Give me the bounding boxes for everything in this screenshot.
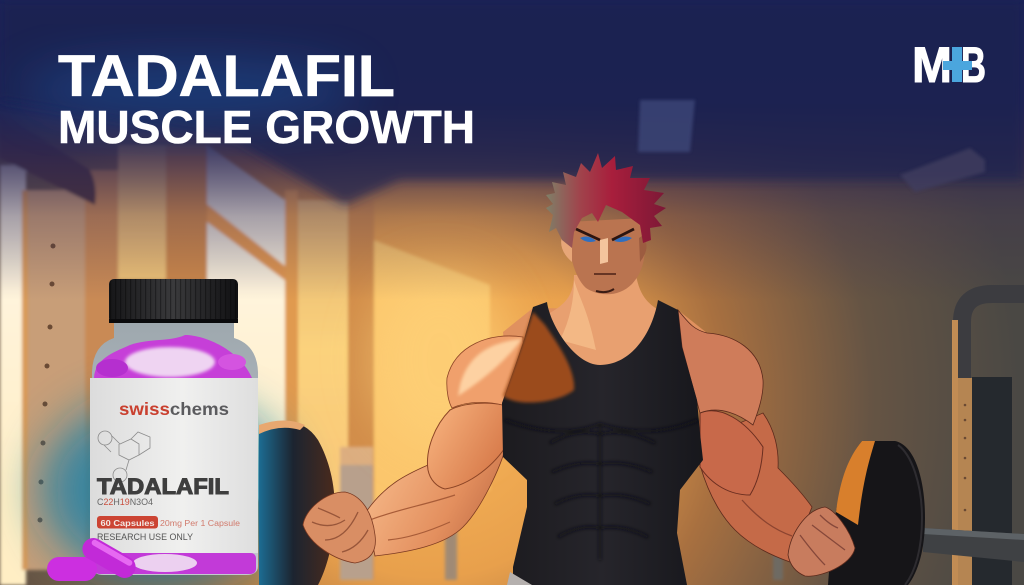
formula: C22H19N3O4	[97, 497, 153, 508]
logo: M+B: B	[961, 37, 986, 93]
red spiky hair	[546, 153, 666, 248]
right arm	[678, 310, 855, 576]
grey shorts	[507, 572, 532, 585]
glass jar	[92, 323, 258, 575]
face	[561, 218, 647, 294]
dosage: 20mg Per 1 Capsule	[160, 518, 240, 528]
right gym machine	[952, 294, 1024, 585]
swisschems brand: swisschems	[119, 399, 229, 419]
molecule diagram	[98, 431, 150, 482]
logo: M+B: M	[912, 37, 952, 93]
left arm	[303, 336, 523, 563]
bottle cap	[109, 279, 238, 323]
research use only: RESEARCH USE ONLY	[97, 532, 194, 543]
black tank top	[502, 300, 703, 585]
title	[58, 44, 475, 153]
right barbell	[828, 441, 1024, 585]
left fist	[303, 492, 375, 563]
loose capsules	[47, 534, 140, 582]
tank sun patch	[503, 312, 574, 403]
abdominal muscles	[505, 420, 698, 560]
purple capsules bottom	[94, 553, 256, 574]
logo: M+B	[912, 37, 986, 93]
forearm	[366, 410, 507, 556]
left barbell plate	[259, 420, 335, 585]
capsule badge	[97, 516, 158, 528]
capsule badge: 60 Capsules	[100, 518, 155, 528]
label: TADALAFIL: TADALAFIL	[97, 474, 229, 499]
shoulders and traps	[503, 308, 707, 400]
bicep	[427, 403, 508, 489]
purple capsules top	[94, 335, 252, 378]
shoulder	[678, 310, 763, 425]
right fist	[788, 507, 855, 576]
neck and chest	[540, 275, 662, 365]
dots on rack	[38, 244, 56, 522]
product bottle	[47, 279, 258, 582]
white label	[90, 378, 258, 553]
navy ceiling gradient	[0, 0, 1024, 300]
shoulder	[447, 336, 523, 408]
title: MUSCLE GROWTH	[58, 101, 475, 153]
man	[303, 153, 855, 585]
forearm and tricep	[700, 413, 812, 562]
title: TADALAFIL	[58, 44, 395, 109]
bicep	[700, 411, 763, 495]
blue glow behind bottle	[40, 395, 290, 585]
